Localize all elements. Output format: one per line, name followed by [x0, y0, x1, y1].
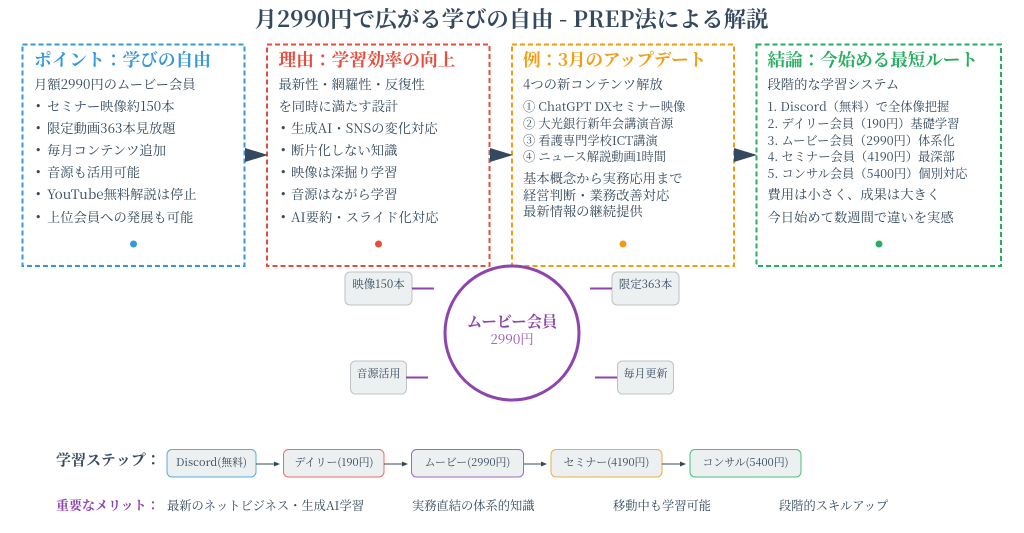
title: 月2990円で広がる学びの自由 - PREP法による解説	[255, 2, 768, 34]
step: discord: Discord(無料)	[176, 454, 247, 470]
arrow: example to conclusion	[734, 148, 757, 162]
step: movie	[412, 450, 524, 477]
text block: reason list: •	[280, 166, 286, 179]
text block: point list: •	[35, 166, 42, 179]
text block: route list: 3. ムービー会員（2990円）体系化	[768, 131, 955, 149]
node: monthly update: 毎月更新	[624, 365, 668, 381]
node: audio: 音源活用	[356, 365, 400, 381]
text block: point list	[34, 74, 197, 226]
text block: route list: 2. デイリー会員（190円）基礎学習	[768, 114, 959, 132]
node: audio	[350, 361, 428, 394]
text block: example summary: 経営判断・業務改善対応	[523, 185, 670, 204]
text block: learning system: 段階的な学習システム	[768, 74, 899, 93]
panel: reason	[267, 44, 490, 266]
arrow: reason to example	[490, 148, 513, 162]
arrow	[256, 462, 280, 466]
text block: reason list: •	[280, 122, 286, 135]
text block: point list: •	[35, 211, 42, 224]
text block: reason list: 断片化しない知識	[291, 140, 398, 159]
node: monthly update	[595, 361, 674, 394]
dot: example	[620, 240, 626, 248]
node: limited 363	[590, 272, 679, 305]
text block: example list: ① ChatGPT DXセミナー映像	[523, 97, 685, 115]
arrow	[662, 462, 686, 466]
label: key merits: 重要なメリット：	[56, 495, 159, 514]
text block: reason list: •	[280, 211, 286, 224]
heading: conclusion: 結論：今始める最短ルート	[768, 47, 978, 72]
heading: point: ポイント：学びの自由	[34, 47, 211, 72]
step: consulting	[690, 450, 801, 477]
text block: reason list	[278, 74, 439, 226]
text block: example list: ④ ニュース解説動画1時間	[523, 147, 666, 165]
text block: reason list: 生成AI・SNSの変化対応	[291, 118, 438, 137]
step: consulting: コンサル(5400円)	[702, 454, 789, 470]
text block: point list: •	[35, 100, 42, 113]
text block: reason list: 音源はながら学習	[291, 184, 397, 203]
label: learning steps: 学習ステップ：	[56, 449, 161, 470]
merit: latest topics: 最新のネットビジネス・生成AI学習	[167, 496, 364, 514]
text block: conclusion summary: 今日始めて数週間で違いを実感	[768, 207, 954, 226]
text block: conclusion summary: 費用は小さく、成果は大きく	[768, 184, 940, 203]
step: daily	[284, 450, 384, 477]
text block: new contents: 4つの新コンテンツ解放	[523, 74, 663, 93]
text block: reason list: AI要約・スライド化対応	[291, 207, 439, 226]
step: seminar	[551, 450, 662, 477]
text block: route list: 5. コンサル会員（5400円）個別対応	[768, 164, 968, 182]
merit: step up: 段階的スキルアップ	[779, 496, 889, 514]
step: discord	[167, 450, 256, 477]
text block: reason list: •	[280, 144, 286, 157]
text block: point list: 音源も活用可能	[47, 162, 140, 181]
text block: conclusion summary	[768, 184, 954, 226]
text block: example summary: 基本概念から実務応用まで	[523, 168, 683, 187]
text block: example summary	[523, 168, 683, 220]
node: video 150: 映像150本	[352, 276, 405, 292]
arrow	[384, 462, 408, 466]
dot: reason	[375, 240, 382, 248]
text block: point list: YouTube無料解説は停止	[47, 184, 197, 203]
heading: reason: 理由：学習効率の向上	[278, 47, 456, 72]
text block: route list: 4. セミナー会員（4190円）最深部	[768, 147, 955, 165]
text block: point list: 上位会員への発展も可能	[47, 207, 193, 226]
text block: point list: セミナー映像約150本	[47, 96, 174, 115]
step: movie: ムービー(2990円)	[425, 454, 510, 470]
key merits	[56, 495, 889, 514]
panel: example	[512, 44, 734, 266]
text block: point list: •	[35, 122, 42, 135]
arrow: point to reason	[245, 148, 268, 162]
text block: point list: 毎月コンテンツ追加	[47, 140, 166, 159]
learning steps	[56, 449, 801, 477]
circle: movie membership	[445, 266, 579, 400]
text block: point list: 限定動画363本見放題	[47, 118, 176, 137]
circle: movie membership: ムービー会員	[467, 310, 558, 332]
panel: conclusion	[756, 44, 1001, 266]
text block: point list: •	[35, 144, 42, 157]
arrow	[524, 462, 547, 466]
text block: route list	[768, 97, 968, 182]
merit: mobile learning: 移動中も学習可能	[613, 496, 711, 514]
text block: example list: ③ 看護専門学校ICT講演	[523, 131, 659, 149]
circle: movie membership: 2990円	[490, 329, 534, 348]
dot: point	[130, 240, 137, 248]
text block: point list: •	[35, 188, 42, 201]
text block: reason list: を同時に満たす設計	[278, 96, 398, 115]
text block: reason list: 最新性・網羅性・反復性	[278, 74, 425, 93]
central diagram: movie membership	[345, 266, 679, 400]
text block: route list: 1. Discord（無料）で全体像把握	[768, 97, 950, 115]
text block: point list: 月額2990円のムービー会員	[34, 74, 196, 93]
heading: example: 例：3月のアップデート	[523, 47, 706, 72]
text block: example list	[523, 97, 685, 165]
node: video 150	[345, 272, 434, 305]
text block: reason list: •	[280, 188, 286, 201]
panel: point	[22, 44, 244, 266]
step: daily: デイリー(190円)	[295, 454, 373, 470]
dot: conclusion	[876, 240, 882, 248]
step: seminar: セミナー(4190円)	[564, 454, 649, 470]
text block: example summary: 最新情報の継続提供	[523, 201, 643, 220]
text block: reason list: 映像は深掘り学習	[291, 162, 397, 181]
text block: example list: ② 大光銀行新年会講演音源	[523, 114, 674, 132]
merit: practical knowledge: 実務直結の体系的知識	[412, 496, 534, 514]
node: limited 363: 限定363本	[619, 276, 673, 292]
